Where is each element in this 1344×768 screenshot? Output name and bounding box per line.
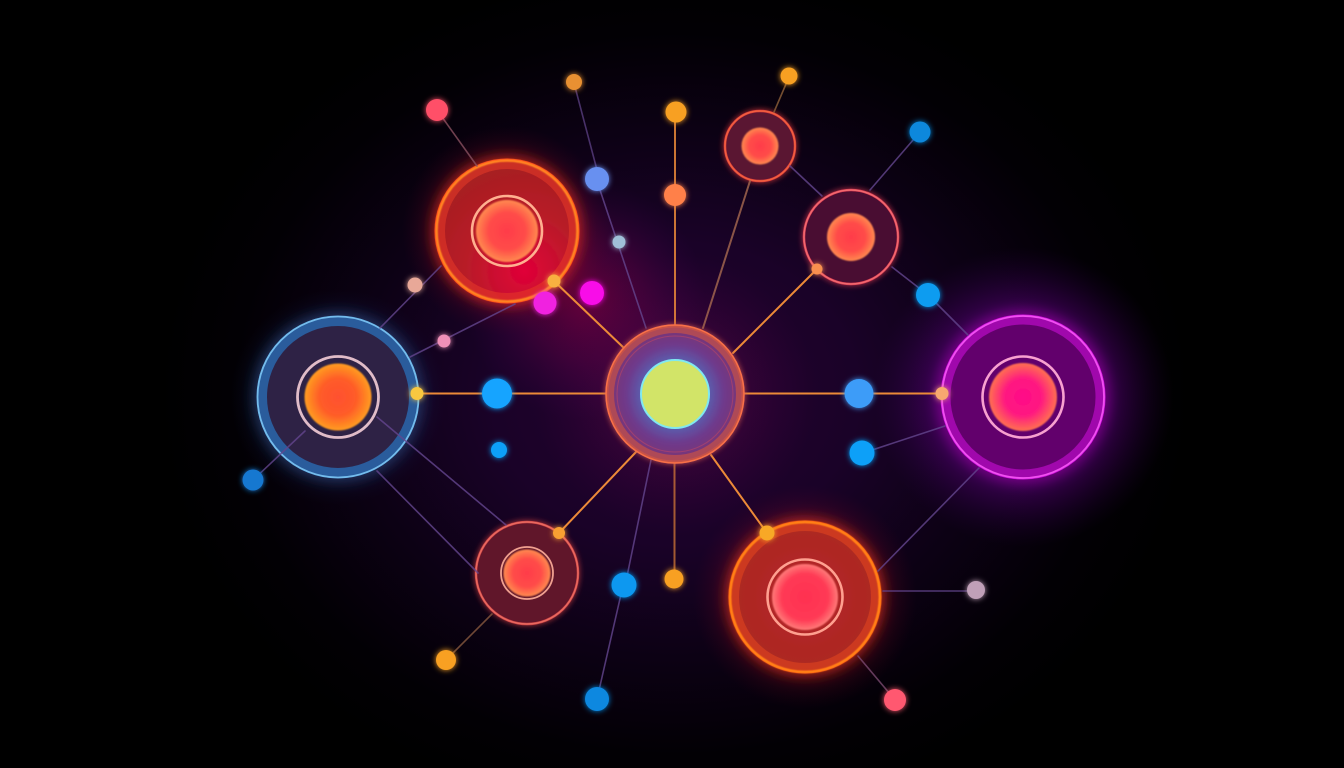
magenta dots bbox=[534, 281, 604, 314]
connector lines bbox=[253, 77, 979, 700]
node: left blue bbox=[258, 316, 418, 478]
orange and red dots bbox=[426, 68, 906, 711]
junction dots bbox=[410, 264, 948, 540]
central hub bbox=[606, 325, 744, 463]
blue dots bbox=[242, 122, 940, 711]
purple thin lines bbox=[253, 77, 979, 700]
node: small top bbox=[725, 111, 795, 181]
node: small bottom left bbox=[476, 522, 578, 624]
node: small right bbox=[804, 190, 898, 284]
node: bottom red bbox=[730, 522, 880, 672]
node: top red bbox=[436, 160, 578, 302]
satellite dots bbox=[242, 68, 985, 711]
pale dots bbox=[408, 236, 985, 599]
orange spokes from hub bbox=[417, 122, 942, 578]
node: right magenta bbox=[942, 316, 1104, 478]
